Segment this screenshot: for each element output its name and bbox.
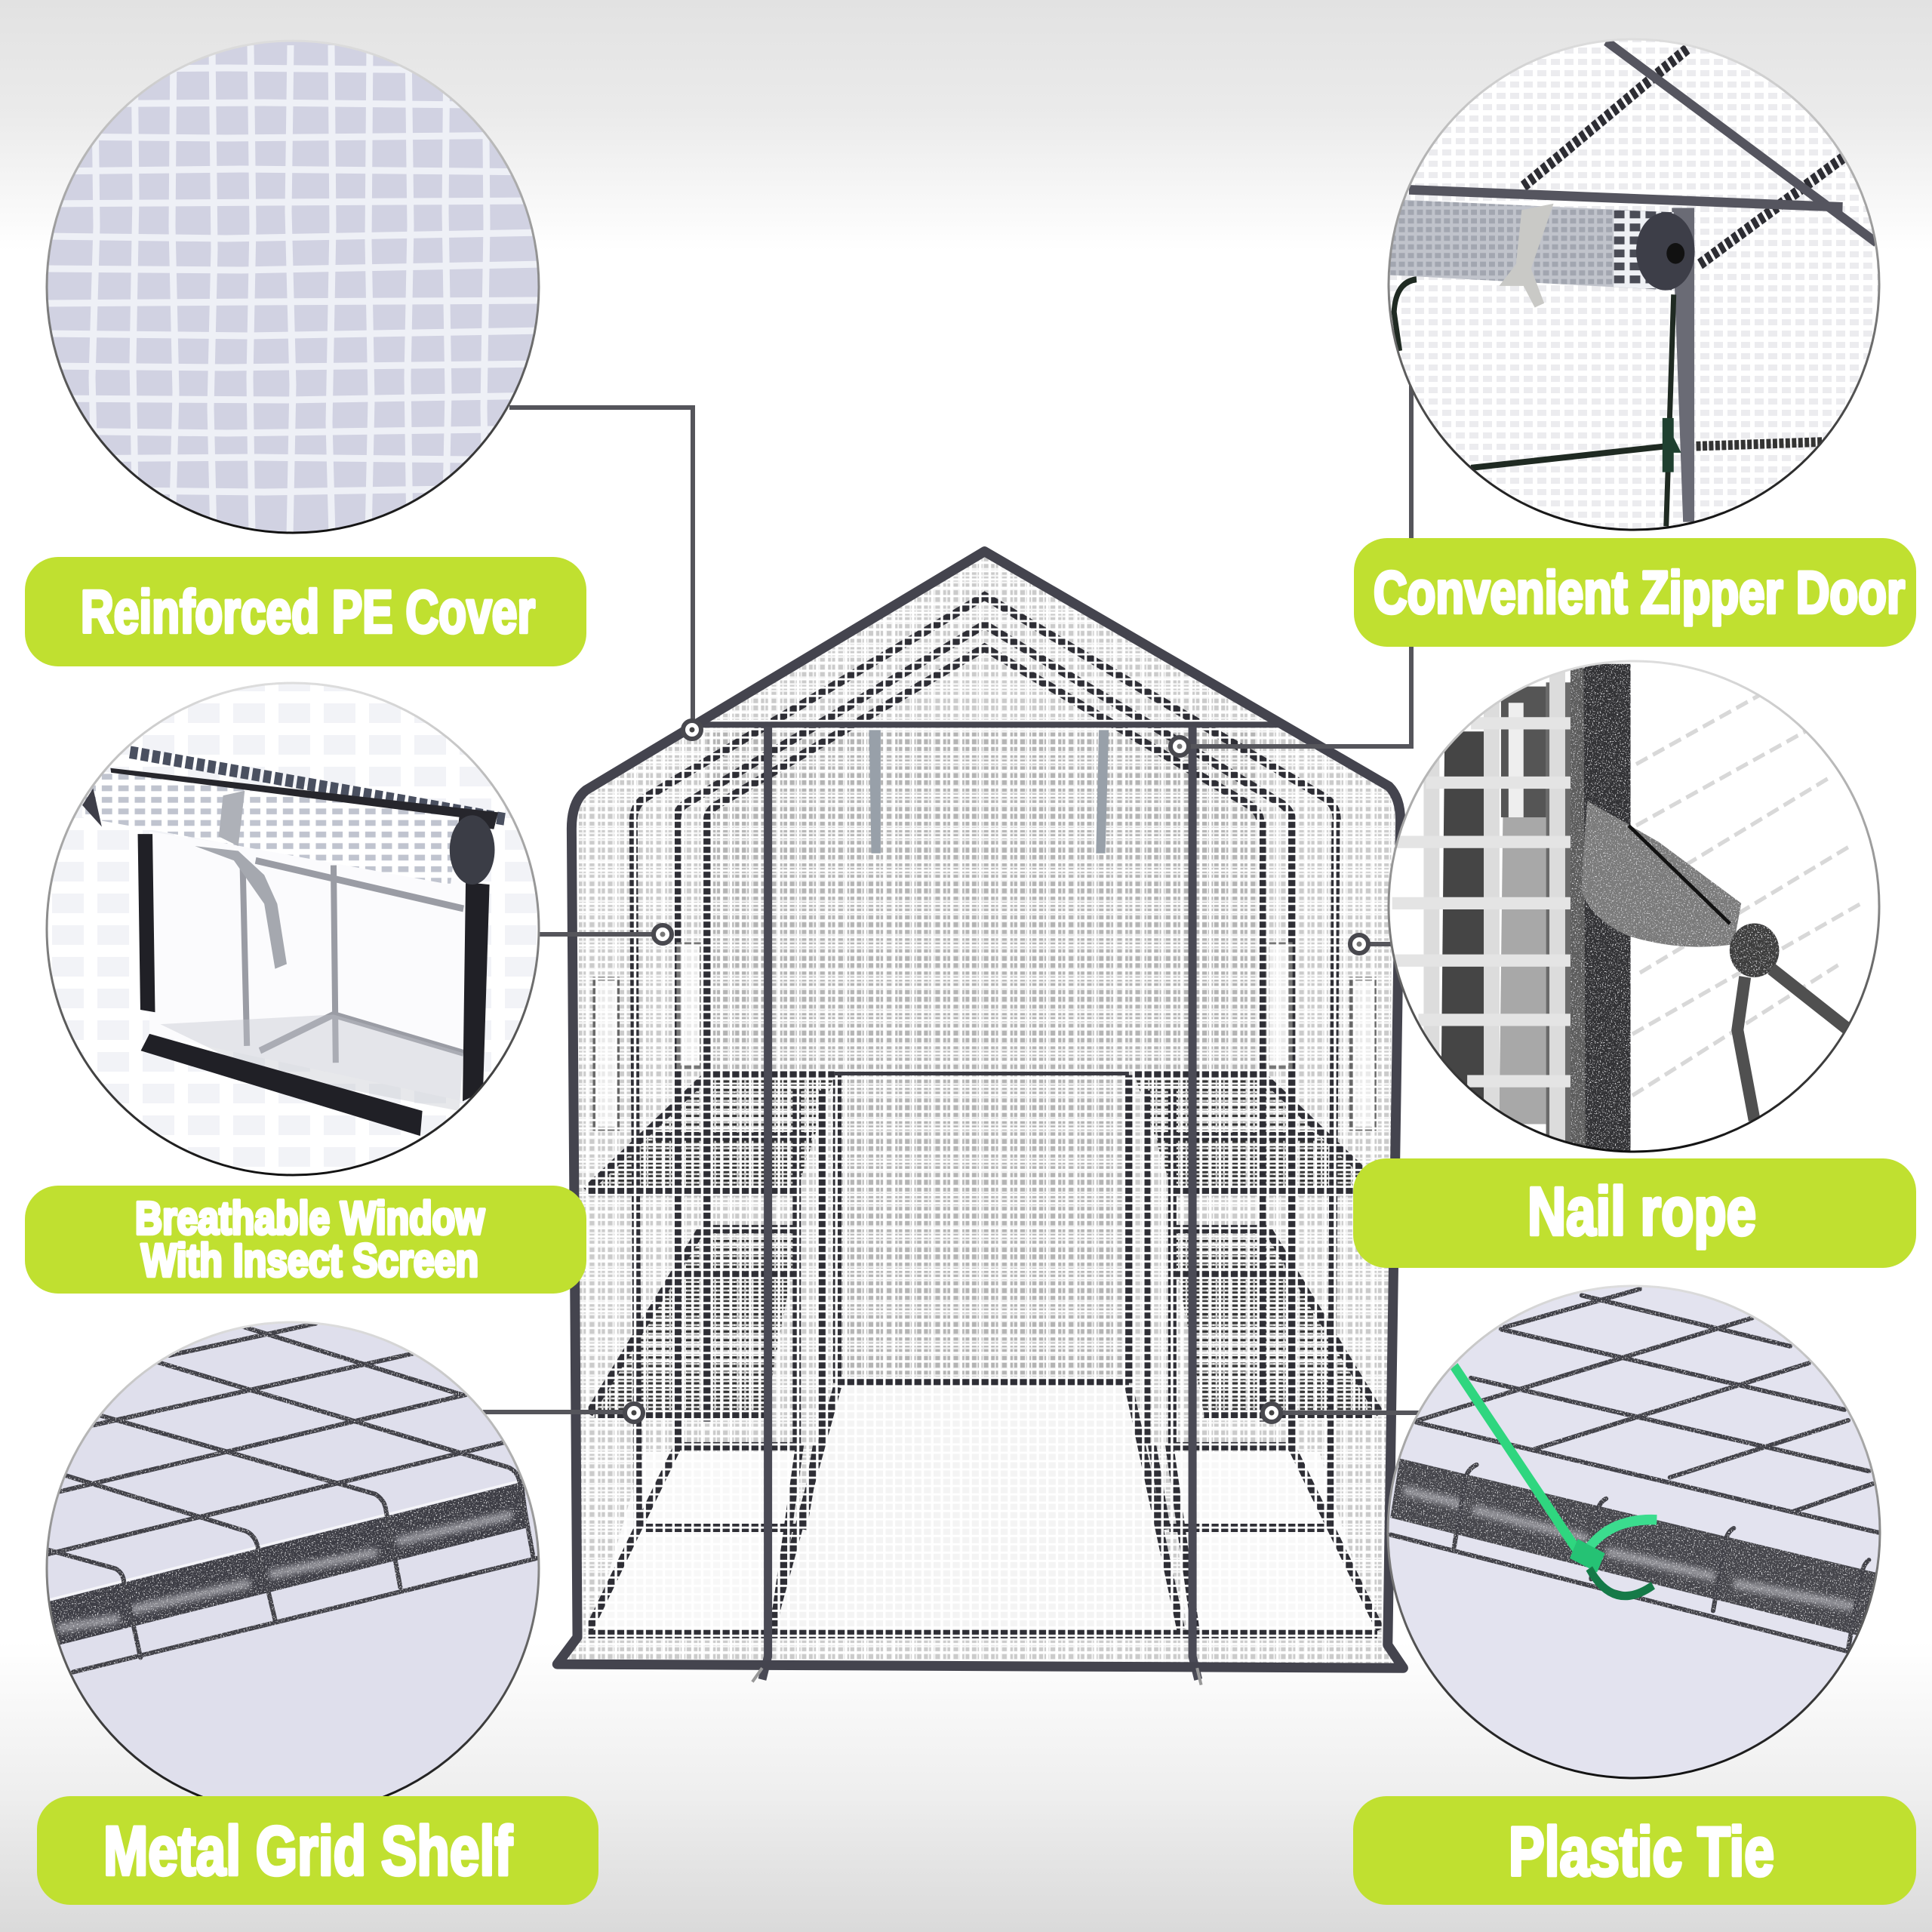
faint background weave xyxy=(1632,687,1861,1096)
label: Breathable Window With Insect Screen xyxy=(25,1186,586,1294)
label: Metal Grid Shelf: Metal Grid Shelf xyxy=(103,1813,512,1890)
roll strap xyxy=(219,791,245,846)
roll end cap xyxy=(1636,212,1695,291)
back shelf frame xyxy=(586,1075,1377,1634)
marker: PE cover xyxy=(683,721,701,739)
label: Breathable Window With Insect Screen: Breathable Window xyxy=(135,1192,485,1244)
green tie head xyxy=(1570,1539,1605,1573)
label: Plastic Tie: Plastic Tie xyxy=(1509,1814,1774,1890)
green frame poles xyxy=(1394,279,1674,526)
label: Breathable Window With Insect Screen: With Insect Screen xyxy=(141,1235,478,1286)
inner frame view xyxy=(242,860,463,1063)
detail circle: PE cover xyxy=(45,38,543,536)
roll end cap xyxy=(450,815,495,884)
net verticals xyxy=(1432,666,1558,1145)
detail circle: metal shelf xyxy=(45,1321,543,1819)
tube sheen xyxy=(1404,1491,1854,1607)
circle outline xyxy=(1388,1286,1880,1778)
light tube column xyxy=(1499,817,1546,1124)
label: Nail rope: Nail rope xyxy=(1527,1174,1756,1250)
woven flap xyxy=(1582,801,1741,947)
detail circle: nail rope xyxy=(1385,657,1883,1155)
leader line: plastic tie xyxy=(1281,1411,1426,1415)
circle outline xyxy=(47,683,539,1175)
roof frame dashes xyxy=(1524,48,1843,264)
back wall top line xyxy=(835,1072,1129,1075)
marker: zipper door xyxy=(1171,737,1189,755)
marker: shelf xyxy=(625,1404,643,1422)
leader line: metal shelf xyxy=(483,1410,626,1414)
dark window header xyxy=(110,768,498,829)
label: Plastic Tie xyxy=(1353,1796,1916,1905)
greenhouse illustration xyxy=(552,543,1412,1685)
shelf tube xyxy=(48,1481,529,1647)
rope ends xyxy=(1737,969,1847,1120)
left window band xyxy=(138,834,155,1012)
zipper pulls xyxy=(752,1668,1201,1685)
green tie loop xyxy=(1583,1520,1657,1555)
dark tube column xyxy=(1441,731,1487,1103)
side frames and shelves left xyxy=(586,821,835,1629)
tube sheen xyxy=(57,1515,512,1629)
detail circle: plastic tie xyxy=(1385,1283,1883,1781)
circle outline xyxy=(1389,39,1879,530)
circle outline xyxy=(47,1322,539,1814)
inner mesh shelf xyxy=(160,1014,463,1111)
top horizontal bar xyxy=(1409,189,1843,207)
detail circle: zipper door xyxy=(1385,38,1883,536)
green tie strap xyxy=(1454,1366,1578,1552)
tube top highlight xyxy=(48,1480,524,1600)
circle outline xyxy=(47,41,539,533)
cover outline xyxy=(557,552,1403,1668)
label: Nail rope xyxy=(1353,1158,1916,1268)
shelf wires xyxy=(1390,1289,1878,1651)
label: Reinforced PE Cover: Reinforced PE Cover xyxy=(81,578,535,645)
label: Reinforced PE Cover xyxy=(25,557,586,666)
rolled door straps xyxy=(869,730,1109,854)
rolled door xyxy=(1390,199,1674,291)
right window band xyxy=(463,882,490,1101)
roof frame chevrons xyxy=(633,596,1337,821)
dark band xyxy=(1583,664,1631,1151)
leader line: PE cover xyxy=(509,408,693,721)
window opening xyxy=(149,832,466,1101)
front white lattice threads xyxy=(552,543,1412,1675)
net horizontals xyxy=(1392,723,1583,1081)
door zipper lines xyxy=(762,727,1198,1679)
label: Convenient Zipper Door xyxy=(1354,538,1916,647)
door zipper top bar xyxy=(702,721,1279,728)
left roll end xyxy=(82,789,102,827)
bottom window band xyxy=(141,1034,423,1136)
green tie tail xyxy=(1589,1568,1653,1596)
reinforcing grid threads xyxy=(92,45,487,536)
back wall mesh xyxy=(707,732,1259,1071)
detail circle: window xyxy=(45,679,543,1177)
leader line: nail rope xyxy=(1367,942,1396,946)
roof edge xyxy=(1606,42,1876,242)
band edge mesh xyxy=(1571,666,1587,1151)
side frames and shelves right xyxy=(1135,821,1383,1629)
pole joint xyxy=(1663,418,1681,472)
marker: nail rope xyxy=(1350,935,1368,953)
back lower panel xyxy=(837,1075,1129,1383)
roll dark end mesh xyxy=(1614,210,1674,291)
marker: window xyxy=(654,925,672,943)
top dashed seam xyxy=(130,752,507,820)
door vertical band xyxy=(1672,208,1694,522)
leader line: zipper door xyxy=(1189,377,1411,746)
floor xyxy=(592,1385,1374,1631)
circle outline xyxy=(1389,661,1879,1152)
side frame dash xyxy=(1697,441,1824,446)
leader line: window xyxy=(528,932,654,937)
roll tie xyxy=(1499,204,1554,308)
marker: plastic tie xyxy=(1263,1404,1281,1422)
tie ribbon xyxy=(195,846,287,969)
rope knot xyxy=(1730,923,1779,977)
shelf wires xyxy=(48,1324,537,1672)
rolled-up flap xyxy=(82,771,459,884)
label: Metal Grid Shelf xyxy=(37,1796,598,1905)
shelf tube xyxy=(1390,1458,1876,1636)
greenhouse cover silhouette xyxy=(557,552,1403,1668)
